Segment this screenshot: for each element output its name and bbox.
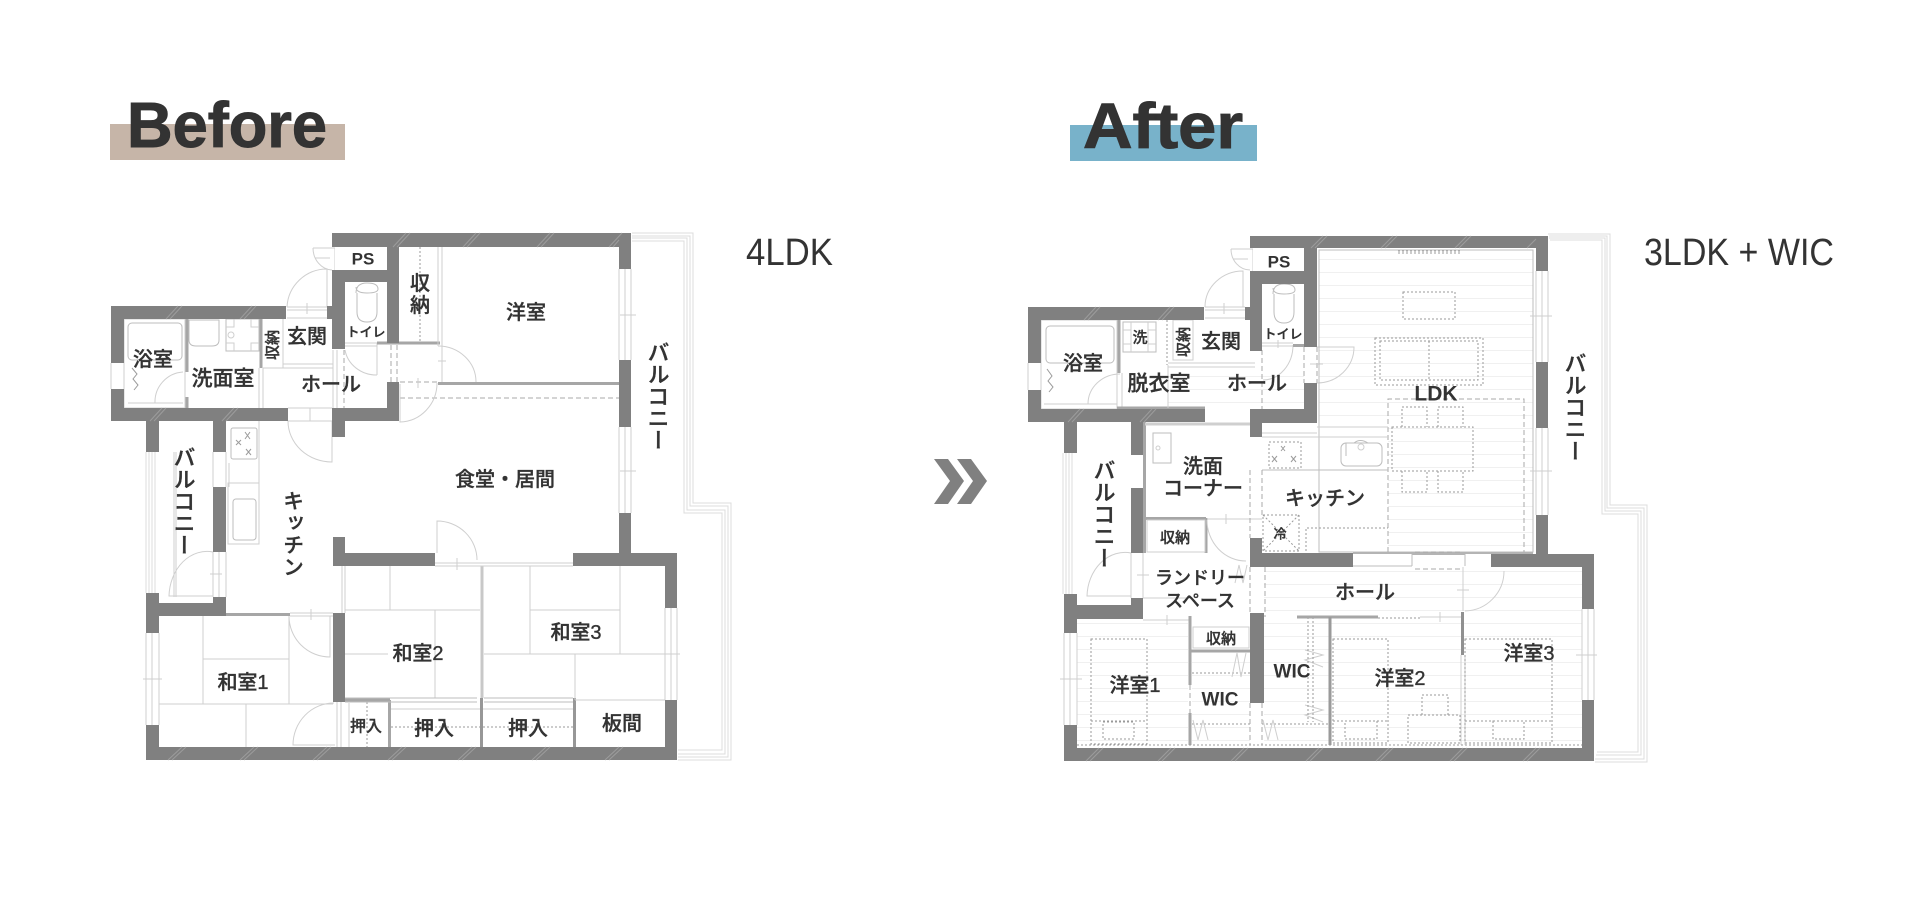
- room labels: 洋室: [506, 301, 546, 324]
- room labels: 冷: [1273, 526, 1287, 542]
- room labels: 浴室: [133, 348, 173, 371]
- floor plan: before: [111, 233, 731, 760]
- room labels: 和室1: [217, 671, 269, 694]
- interior lines: kitchen and left balcony access: [169, 421, 259, 597]
- room labels: 洗面: [1183, 455, 1223, 478]
- room labels: 押入: [350, 718, 382, 736]
- room labels: 玄関: [1201, 330, 1241, 353]
- room labels: ホール: [301, 374, 361, 396]
- room labels: 玄関: [287, 325, 327, 348]
- room labels: 押入: [414, 717, 454, 740]
- room labels: 収納: [1206, 630, 1236, 648]
- heading: After: After: [1083, 90, 1243, 162]
- room labels: 洗面室: [192, 368, 254, 390]
- wood floor texture: [1077, 250, 1582, 745]
- room labels: キッチン: [280, 490, 304, 578]
- interior lines: hall and bedrooms: [1028, 363, 1597, 745]
- interior lines: wash corner, laundry, storage: [1087, 422, 1328, 745]
- room labels: [133, 250, 670, 740]
- layout label: 3LDK + WIC: 3LDK + WIC: [1644, 232, 1834, 274]
- walls: [1028, 236, 1594, 761]
- room labels: [1063, 252, 1586, 710]
- floor plan: after: [1028, 234, 1647, 762]
- balcony rails: [146, 233, 731, 760]
- room labels: 収納: [1176, 327, 1192, 357]
- room labels: コーナー: [1163, 478, 1243, 500]
- room labels: 脱衣室: [1128, 372, 1190, 396]
- walls: [111, 233, 677, 760]
- room labels: バルコニー: [1090, 459, 1116, 569]
- room labels: LDK: [1414, 382, 1458, 406]
- room labels: WIC: [1202, 690, 1239, 710]
- room labels: WIC: [1274, 662, 1311, 682]
- room labels: バルコニー: [170, 446, 196, 556]
- interior lines: tatami rooms and closets: [111, 363, 680, 747]
- room labels: 洋室2: [1374, 667, 1426, 690]
- room labels: スペース: [1165, 591, 1235, 611]
- room labels: ホール: [1335, 582, 1395, 604]
- room labels: トイレ: [1263, 326, 1303, 342]
- interior lines: bath, dressing room, entrance, toilet: [1041, 248, 1354, 409]
- room labels: 収納: [1160, 530, 1190, 546]
- room labels: 納: [410, 294, 430, 317]
- room labels: 浴室: [1063, 352, 1103, 375]
- room labels: PS: [1268, 252, 1290, 272]
- furniture and lines: LDK: [1262, 250, 1552, 554]
- interior lines: bath, washroom, entrance, toilet: [124, 247, 440, 462]
- room labels: 洋室3: [1503, 642, 1555, 665]
- room labels: ランドリー: [1155, 568, 1245, 588]
- room labels: トイレ: [346, 324, 386, 340]
- room labels: バルコニー: [644, 341, 670, 451]
- room labels: 食堂・居間: [455, 468, 555, 491]
- interior lines: storage, western room, dining: [400, 247, 636, 513]
- room labels: ホール: [1227, 373, 1287, 395]
- room labels: 収納: [264, 330, 282, 360]
- balcony rails: [1063, 234, 1647, 762]
- room labels: 洗: [1132, 330, 1148, 346]
- arrow: before to after: [934, 459, 987, 504]
- room labels: キッチン: [1285, 488, 1365, 510]
- room labels: 収: [410, 272, 430, 295]
- layout label: 4LDK: 4LDK: [746, 232, 833, 274]
- room labels: 洋室1: [1109, 674, 1161, 697]
- room labels: 和室2: [392, 642, 444, 665]
- heading: Before: Before: [127, 89, 327, 161]
- room labels: バルコニー: [1562, 352, 1586, 462]
- room labels: PS: [352, 250, 374, 268]
- room labels: 和室3: [550, 621, 602, 644]
- room labels: 押入: [508, 717, 548, 740]
- room labels: 板間: [602, 712, 642, 735]
